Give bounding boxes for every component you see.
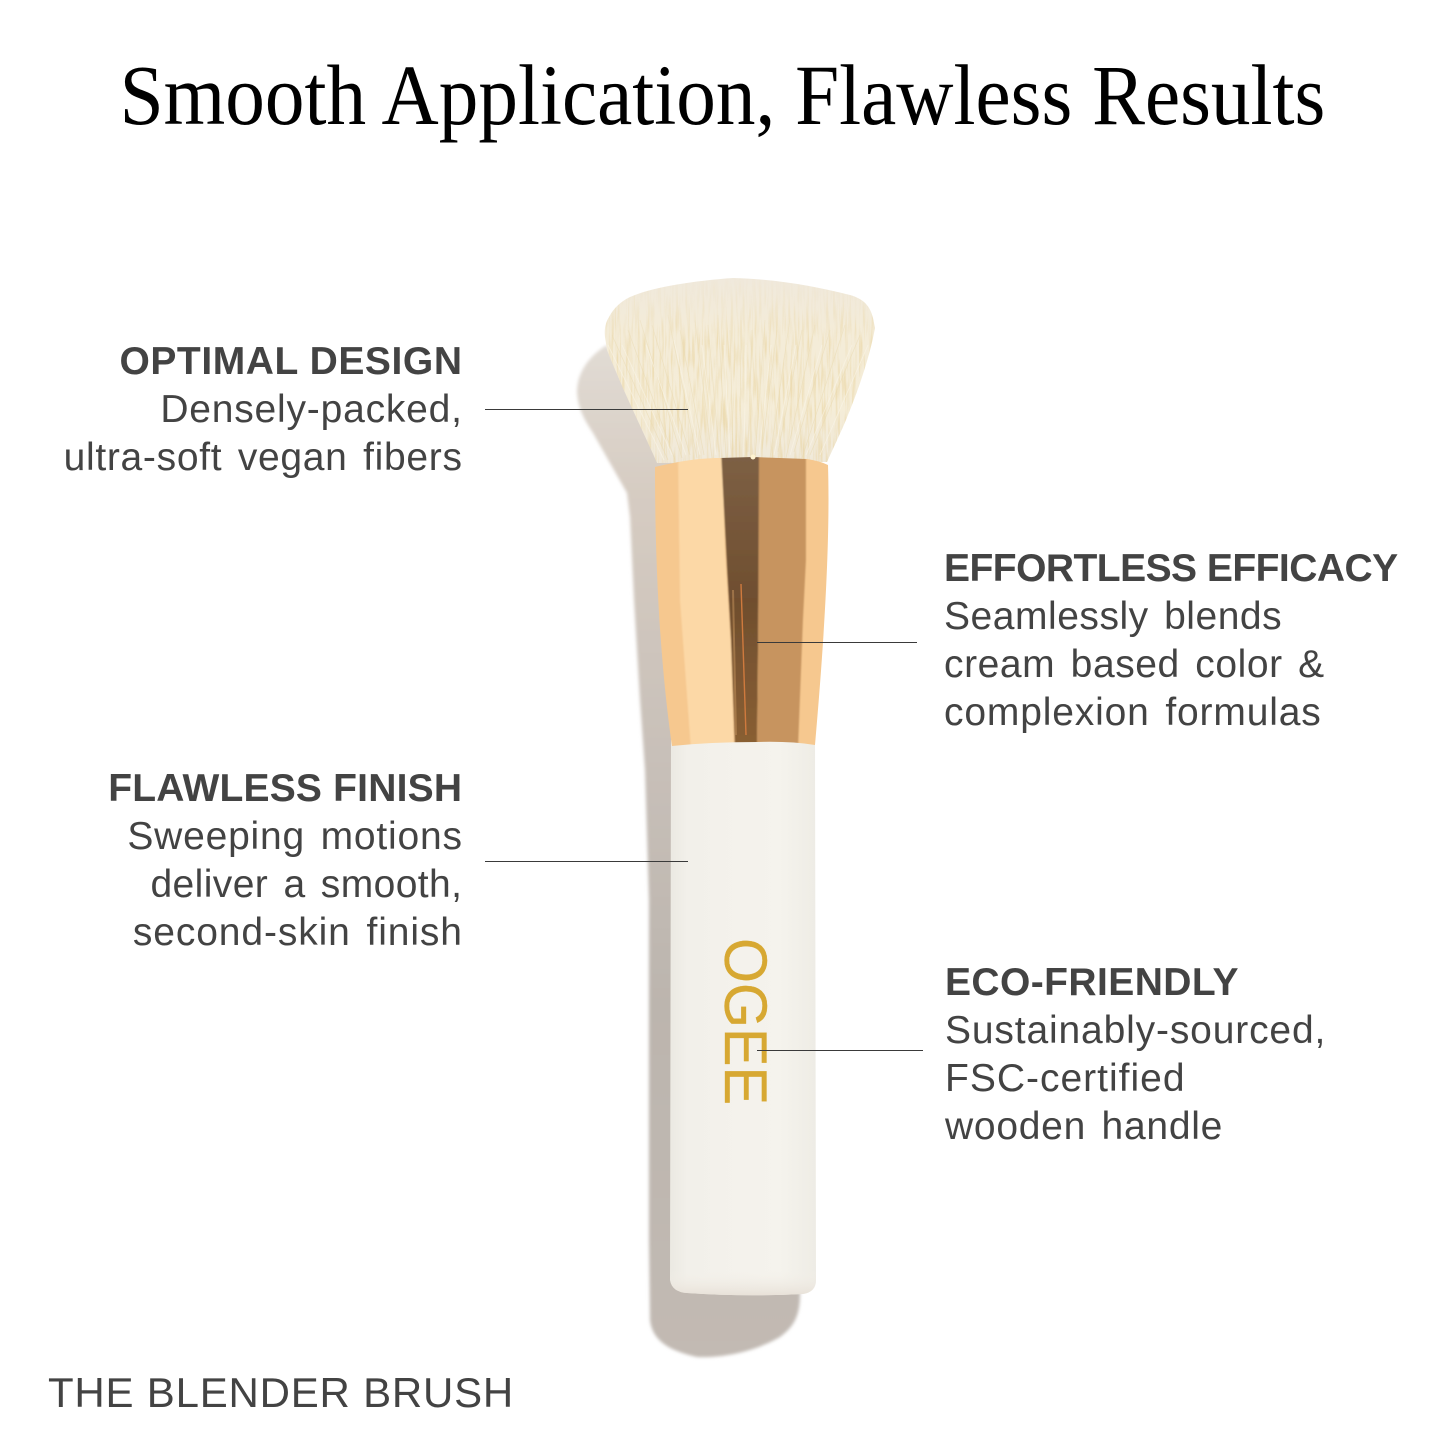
callout: eco-friendly: wooden handle bbox=[945, 1105, 1223, 1148]
callout: eco-friendly bbox=[945, 961, 1326, 1148]
callout: flawless finish: FLAWLESS FINISH bbox=[108, 767, 462, 810]
callout: flawless finish: second-skin finish bbox=[133, 911, 463, 954]
handle bbox=[670, 740, 816, 1295]
bristles bbox=[600, 275, 880, 465]
callout: effortless efficacy bbox=[944, 547, 1398, 734]
callout: flawless finish: Sweeping motions bbox=[127, 815, 463, 858]
callout: eco-friendly: Sustainably-sourced, bbox=[945, 1009, 1326, 1052]
callout: flawless finish: deliver a smooth, bbox=[150, 863, 462, 906]
callout: eco-friendly: ECO-FRIENDLY bbox=[945, 961, 1239, 1004]
callout: optimal design: OPTIMAL DESIGN bbox=[119, 340, 463, 383]
gold ferrule bbox=[650, 450, 835, 750]
ferrule highlight bbox=[750, 454, 756, 460]
callout: eco-friendly: FSC-certified bbox=[945, 1057, 1186, 1100]
callout: optimal design bbox=[64, 340, 463, 479]
product name: THE BLENDER BRUSH bbox=[48, 1369, 514, 1416]
brush illustration bbox=[576, 278, 875, 1359]
title: Smooth Application, Flawless Results bbox=[120, 47, 1325, 143]
callout: effortless efficacy: complexion formulas bbox=[944, 691, 1322, 734]
callout: optimal design: ultra-soft vegan fibers bbox=[64, 436, 463, 479]
callout: effortless efficacy: EFFORTLESS EFFICACY bbox=[944, 547, 1398, 590]
callout: flawless finish bbox=[108, 767, 463, 954]
brand text: OGEE bbox=[712, 938, 779, 1105]
cast shadow bbox=[577, 345, 800, 1357]
callout: optimal design: Densely-packed, bbox=[160, 388, 463, 431]
callout: effortless efficacy: Seamlessly blends bbox=[944, 595, 1282, 638]
callout: effortless efficacy: cream based color & bbox=[944, 643, 1325, 686]
